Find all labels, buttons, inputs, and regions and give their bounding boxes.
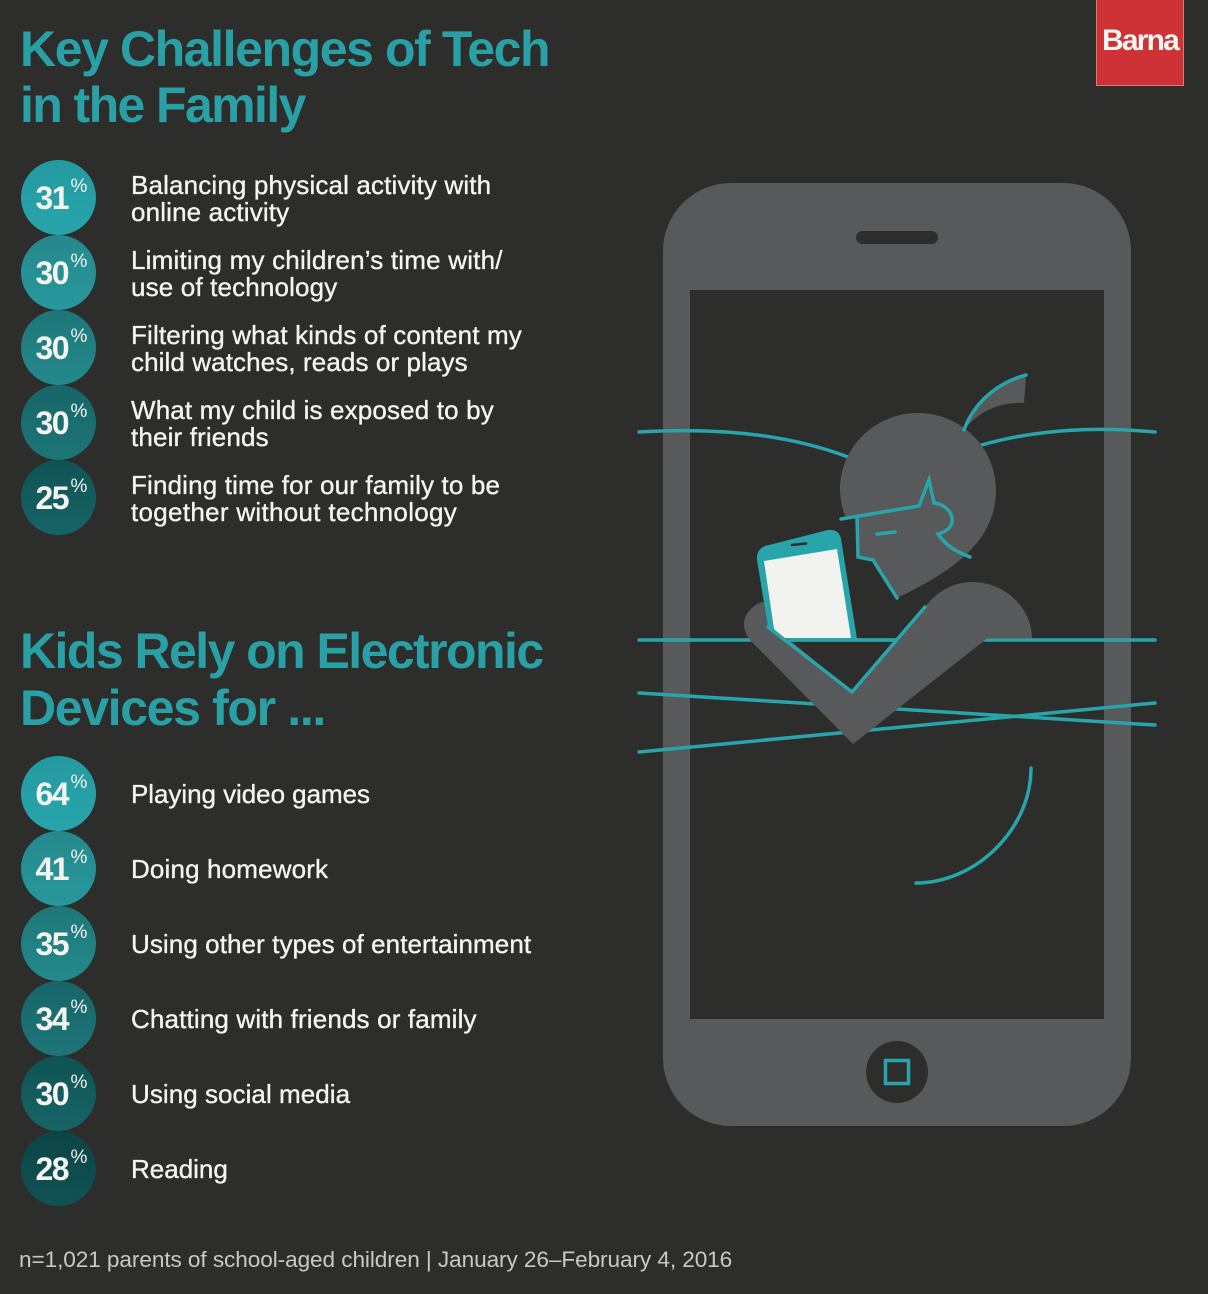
- stat: 41% homework: [21, 831, 328, 906]
- heading: key challenges: Key Challenges of Tech: [20, 21, 549, 77]
- stat: 28% reading: Reading: [131, 1154, 228, 1184]
- stat: 64% video games: 64: [36, 776, 68, 812]
- stat: 64% video games: [21, 756, 370, 831]
- stat: 30% social media: [21, 1056, 350, 1131]
- stat: 64% video games: %: [70, 772, 87, 793]
- large phone outline: [663, 183, 1131, 1126]
- stat: 35% entertainment: Using other types of entertainment: [131, 929, 531, 959]
- stat: 30% limiting time: [21, 235, 503, 310]
- stat: 25% family time: [21, 460, 500, 535]
- stat: 30% friends exposure: their friends: [131, 422, 269, 452]
- stat: 35% entertainment: [21, 906, 532, 981]
- panel: key challenges: [20, 21, 549, 535]
- small phone held by child: [757, 530, 857, 639]
- logo: Barna: [1096, 0, 1184, 86]
- arm inner outline: [768, 607, 925, 692]
- heading: key challenges: [20, 21, 549, 133]
- stat: 30% social media: %: [70, 1072, 87, 1093]
- stat: 41% homework: Doing homework: [131, 854, 328, 884]
- stat: 64% video games: Playing video games: [131, 779, 370, 809]
- stat: 30% friends exposure: [21, 385, 494, 460]
- stat: 31% balancing activity: %: [70, 176, 87, 197]
- heading: kids rely: Kids Rely on Electronic: [20, 623, 543, 679]
- stat: 30% social media: 30: [36, 1076, 68, 1112]
- logo: Barna: Barna: [1102, 24, 1178, 57]
- background lines: [639, 429, 1155, 883]
- stat: 30% limiting time: Limiting my children’s time with/: [131, 245, 503, 275]
- stat: 30% limiting time: %: [70, 251, 87, 272]
- stat: 34% chatting: %: [70, 997, 87, 1018]
- stat: 25% family time: together without technology: [131, 497, 457, 527]
- stat: 34% chatting: Chatting with friends or family: [131, 1004, 477, 1034]
- heading: key challenges: in the Family: [20, 77, 305, 133]
- stat: 30% filtering content: 30: [36, 330, 68, 366]
- figure: arm and shoulder: [744, 582, 1032, 744]
- stat: 30% friends exposure: %: [70, 401, 87, 422]
- stat: 30% limiting time: use of technology: [131, 272, 337, 302]
- footnote: sample and dates: n=1,021 parents of school-aged children | January 26–February 4, 2016: [19, 1247, 732, 1272]
- stat: 31% balancing activity: Balancing physical activity with: [131, 170, 491, 200]
- stat: 25% family time: Finding time for our family to be: [131, 470, 500, 500]
- stat: 31% balancing activity: [21, 160, 491, 235]
- stat: 25% family time: %: [70, 476, 87, 497]
- stat: 30% filtering content: [21, 310, 522, 385]
- stat: 28% reading: 28: [36, 1151, 68, 1187]
- stat: 30% social media: Using social media: [131, 1079, 350, 1109]
- stat: 30% filtering content: Filtering what kinds of content my: [131, 320, 522, 350]
- stat: 30% limiting time: 30: [36, 255, 68, 291]
- panel: kids rely on devices: [20, 623, 543, 1206]
- stat: 35% entertainment: 35: [36, 926, 68, 962]
- stat: 34% chatting: [21, 981, 477, 1056]
- heading: kids rely: Devices for ...: [20, 680, 325, 736]
- heading: kids rely: [20, 623, 543, 736]
- stat: 31% balancing activity: 31: [36, 180, 68, 216]
- stat: 30% filtering content: child watches, reads or plays: [131, 347, 468, 377]
- stat: 35% entertainment: %: [70, 922, 87, 943]
- stat: 30% filtering content: %: [70, 326, 87, 347]
- stat: 28% reading: [21, 1131, 228, 1206]
- figure: head: [840, 375, 1026, 598]
- stat: 31% balancing activity: online activity: [131, 197, 289, 227]
- stat: 41% homework: 41: [36, 851, 68, 887]
- stat: 34% chatting: 34: [36, 1001, 68, 1037]
- stat: 25% family time: 25: [36, 480, 68, 516]
- stat: 28% reading: %: [70, 1147, 87, 1168]
- stat: 41% homework: %: [70, 847, 87, 868]
- stat: 30% friends exposure: What my child is exposed to by: [131, 395, 494, 425]
- stat: 30% friends exposure: 30: [36, 405, 68, 441]
